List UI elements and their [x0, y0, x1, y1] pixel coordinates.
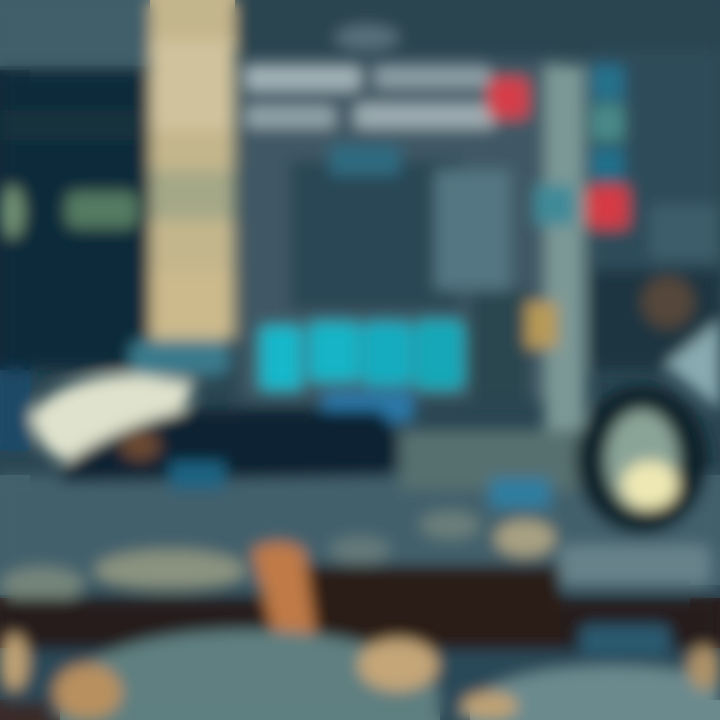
road [0, 430, 720, 603]
panel: cream column [150, 0, 235, 340]
background: upper buildings [0, 0, 720, 370]
panel: dark left storefront [0, 70, 150, 370]
foreground: right table [458, 625, 720, 720]
large teal figure [260, 320, 464, 390]
icon: wheel [576, 276, 720, 534]
panel: central sign [240, 60, 560, 400]
panel: right signal post [526, 65, 624, 465]
foreground: dark band [0, 565, 720, 653]
car: dark vehicle [60, 410, 398, 490]
heading lines [245, 25, 495, 128]
icon: red square top [488, 78, 528, 118]
car: white vehicle [0, 340, 230, 462]
foreground: left table [0, 630, 720, 720]
icon: red square lower [586, 186, 628, 228]
blue caption [322, 392, 414, 422]
icon: orange figure [252, 542, 316, 640]
